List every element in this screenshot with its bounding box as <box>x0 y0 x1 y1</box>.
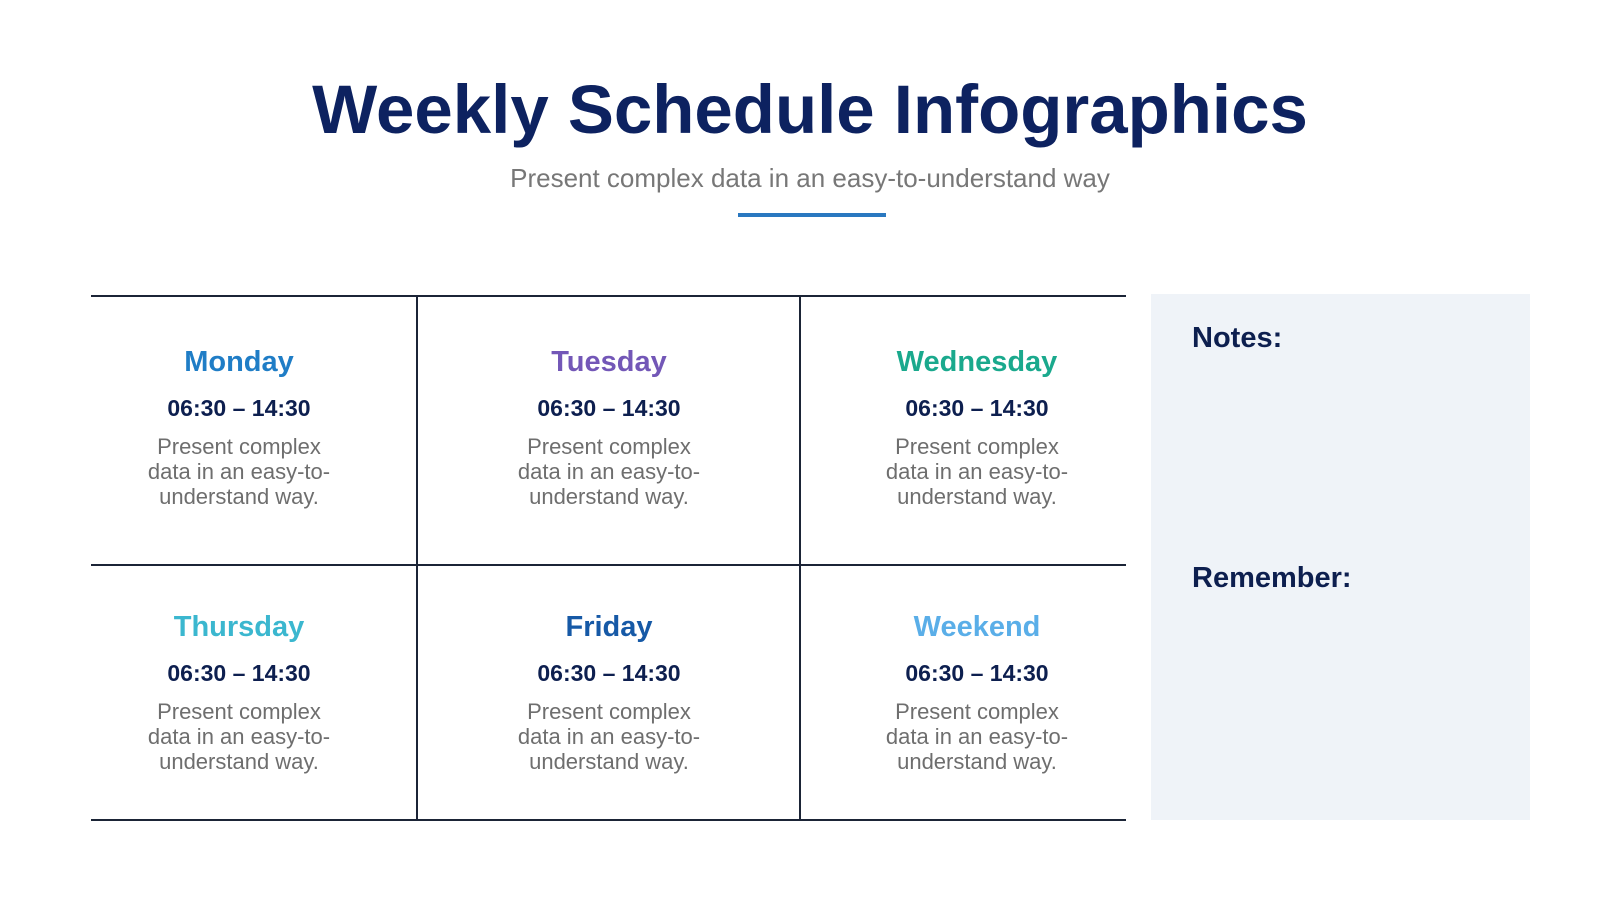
cell: Monday: Monday <box>184 346 294 378</box>
cell: Wednesday: understand way. <box>897 484 1057 509</box>
cell: Weekend: understand way. <box>897 749 1057 774</box>
cell: Friday: data in an easy-to- <box>518 724 700 749</box>
cell: Wednesday: Wednesday <box>897 346 1057 378</box>
cell: Tuesday: data in an easy-to- <box>518 459 700 484</box>
cell: Monday <box>148 346 330 509</box>
heading: remember: Remember: <box>1192 562 1352 594</box>
underline accent <box>738 213 886 217</box>
cell: Tuesday: Present complex <box>527 434 691 459</box>
cell: Friday: understand way. <box>529 749 689 774</box>
cell: Thursday: Thursday <box>174 611 304 643</box>
cell: Thursday: 06:30 – 14:30 <box>167 660 311 686</box>
cell: Weekend: 06:30 – 14:30 <box>905 660 1049 686</box>
cell: Friday: 06:30 – 14:30 <box>537 660 681 686</box>
cell: Weekend: Weekend <box>914 611 1040 643</box>
cell: Monday: 06:30 – 14:30 <box>167 395 311 421</box>
cell: Monday: understand way. <box>159 484 319 509</box>
cell: Weekend: Present complex <box>895 699 1059 724</box>
cell: Weekend <box>886 611 1068 774</box>
cell: Monday: data in an easy-to- <box>148 459 330 484</box>
cell: Weekend: data in an easy-to- <box>886 724 1068 749</box>
cell: Wednesday <box>886 346 1068 509</box>
heading: notes: Notes: <box>1192 322 1282 354</box>
cell: Tuesday: understand way. <box>529 484 689 509</box>
cell: Friday: Friday <box>565 611 653 643</box>
cell: Friday: Present complex <box>527 699 691 724</box>
cell: Monday: Present complex <box>157 434 321 459</box>
cell: Tuesday: Tuesday <box>551 346 667 378</box>
cell: Friday <box>518 611 700 774</box>
subtitle: Present complex data in an easy-to-understand way <box>510 163 1110 193</box>
cell: Wednesday: Present complex <box>895 434 1059 459</box>
cell: Thursday: Present complex <box>157 699 321 724</box>
cell: Wednesday: data in an easy-to- <box>886 459 1068 484</box>
cell: Thursday <box>148 611 330 774</box>
cell: Thursday: data in an easy-to- <box>148 724 330 749</box>
panel: notes <box>1151 294 1530 820</box>
cell: Tuesday: 06:30 – 14:30 <box>537 395 681 421</box>
cell: Tuesday <box>518 346 700 509</box>
title: Weekly Schedule Infographics <box>312 71 1308 148</box>
cell: Thursday: understand way. <box>159 749 319 774</box>
cell: Wednesday: 06:30 – 14:30 <box>905 395 1049 421</box>
